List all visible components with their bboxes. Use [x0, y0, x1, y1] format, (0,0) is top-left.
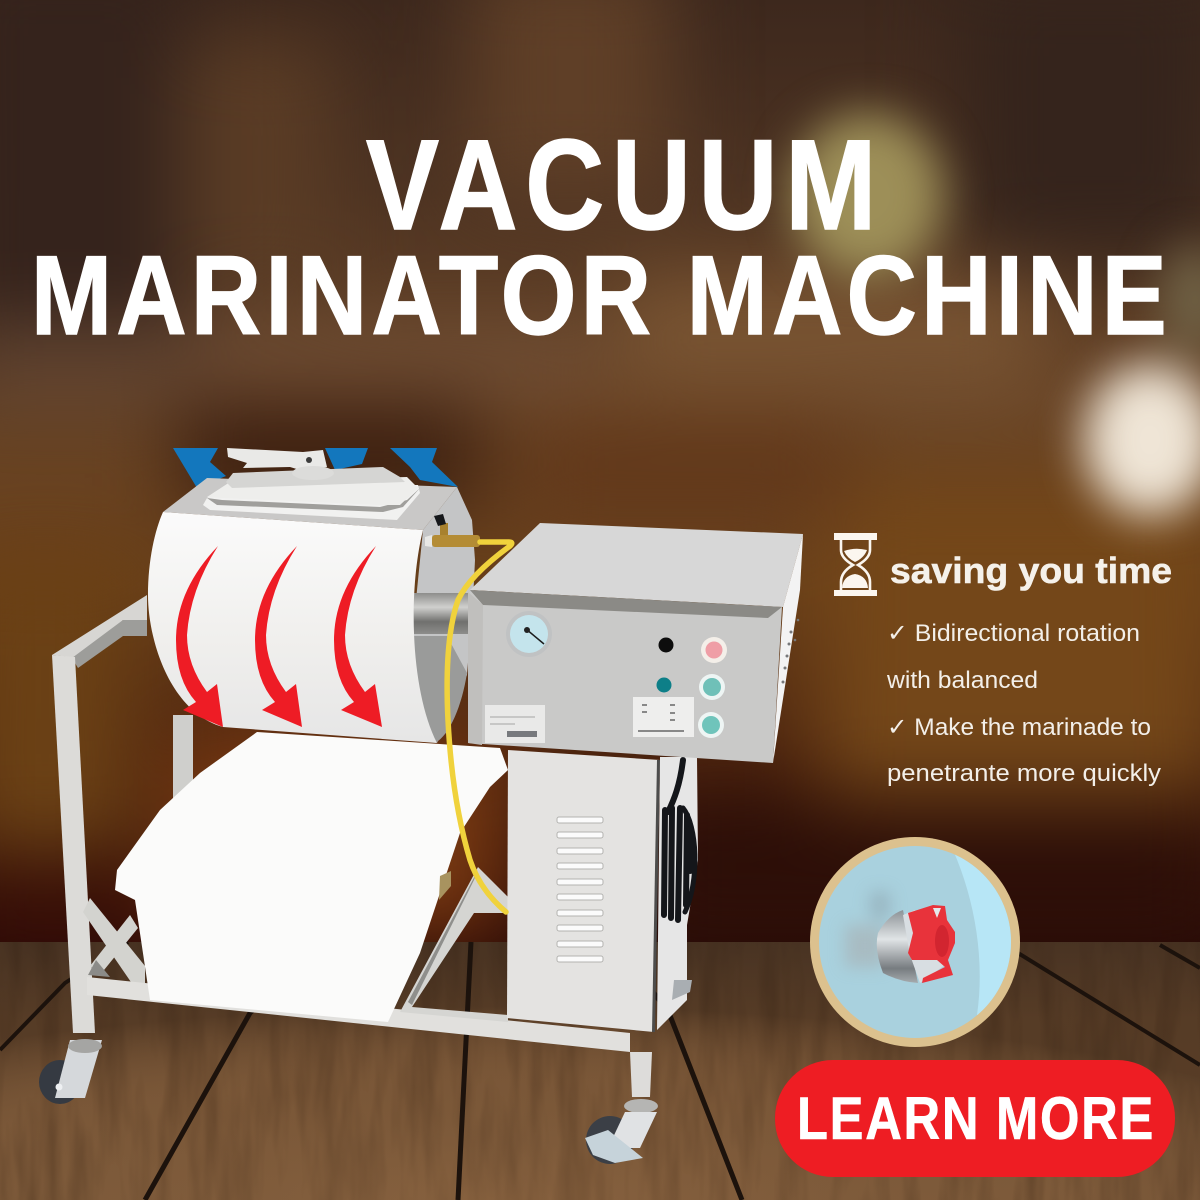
blue rotation arrows	[173, 448, 458, 488]
red rotation arrows	[176, 546, 382, 727]
drum shaft	[413, 593, 470, 634]
cross braces	[83, 898, 145, 985]
lid top step	[226, 467, 405, 488]
pressure gauge	[506, 611, 552, 657]
diagonal rail	[400, 867, 508, 1022]
right rear caster	[672, 980, 692, 1000]
silver sleeve	[877, 910, 918, 983]
blurred shaft shadow	[845, 892, 890, 967]
feature list	[886, 620, 1161, 787]
bottom rail	[87, 977, 630, 1052]
plank gaps	[0, 942, 1200, 1200]
white tub	[115, 732, 508, 1022]
lid	[203, 448, 420, 520]
rear frame post	[173, 715, 193, 800]
lid groove	[207, 488, 420, 512]
louvres	[557, 817, 603, 962]
left frame arm and leg	[52, 595, 147, 1033]
red jaw	[908, 905, 955, 983]
power cable	[664, 760, 695, 920]
serial label	[485, 705, 545, 743]
title	[31, 114, 1171, 358]
yellow hose	[447, 542, 512, 912]
wooden floor	[0, 942, 1200, 1200]
column side panel	[657, 757, 698, 1030]
brass valve	[425, 514, 480, 547]
feature list: with balanced	[886, 667, 1038, 694]
green button two	[698, 712, 724, 738]
feature list: ✓ Bidirectional rotation	[887, 620, 1140, 647]
black switch	[658, 638, 674, 652]
machine illustration	[39, 448, 803, 1164]
lid handle	[227, 448, 327, 470]
panel heading: saving you time	[890, 550, 1172, 591]
learn more button	[775, 1060, 1175, 1177]
feature list: penetrante more quickly	[887, 760, 1161, 787]
button label	[633, 697, 694, 737]
green lamp	[656, 678, 672, 692]
drum back	[163, 478, 475, 743]
green button one	[699, 674, 725, 700]
blurred background	[0, 0, 1200, 950]
lid base rim	[203, 485, 420, 520]
drum front	[148, 512, 437, 743]
saving-time panel	[834, 533, 1172, 787]
left caster	[39, 1039, 102, 1104]
faceplate strips	[470, 590, 782, 618]
right leg and caster	[585, 1052, 658, 1164]
control box	[468, 523, 803, 763]
red button	[701, 637, 727, 663]
pedestal column	[507, 750, 698, 1032]
vent holes	[782, 619, 799, 684]
detail inset: coupling close-up	[810, 837, 1020, 1047]
icon: hourglass	[834, 533, 877, 596]
lid dome	[207, 477, 418, 505]
feature list: ✓ Make the marinade to	[887, 714, 1151, 741]
title: VACUUM	[366, 114, 884, 257]
